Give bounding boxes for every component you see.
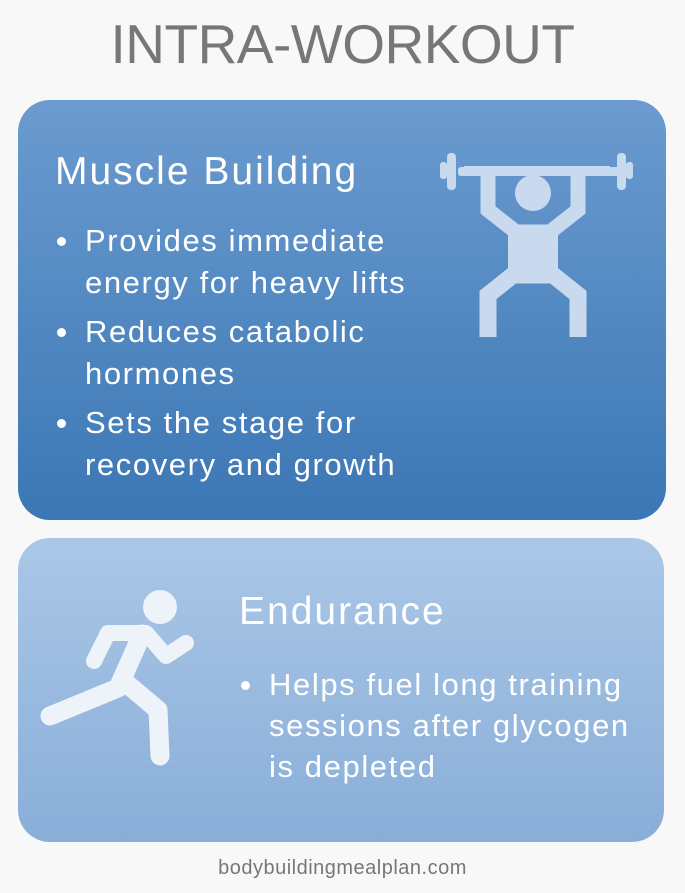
bullet list: muscle building: Sets the stage for	[85, 405, 357, 440]
heading: endurance: Endurance	[239, 590, 446, 633]
panel: muscle building	[18, 100, 666, 520]
bullet list: endurance: Helps fuel long training	[269, 667, 623, 702]
bullet list: muscle building: hormones	[85, 356, 236, 391]
heading: muscle building: Muscle Building	[55, 150, 358, 193]
bullet list: muscle building: recovery and growth	[85, 447, 396, 482]
bullet list: muscle building: Provides immediate	[85, 223, 386, 258]
bullet list: muscle building	[57, 223, 406, 482]
bullet list: muscle building: energy for heavy lifts	[85, 265, 406, 300]
bullet list: endurance	[241, 667, 630, 784]
bullet list: muscle building: Reduces catabolic	[85, 314, 366, 349]
bullet list: endurance: sessions after glycogen	[269, 708, 630, 743]
icon: runner	[40, 590, 194, 766]
icon: weightlifter	[440, 153, 633, 337]
footer: website: bodybuildingmealplan.com	[218, 857, 467, 879]
bullet list: endurance: is depleted	[269, 749, 437, 784]
panel: endurance	[18, 538, 664, 842]
title: INTRA-WORKOUT	[110, 13, 574, 75]
